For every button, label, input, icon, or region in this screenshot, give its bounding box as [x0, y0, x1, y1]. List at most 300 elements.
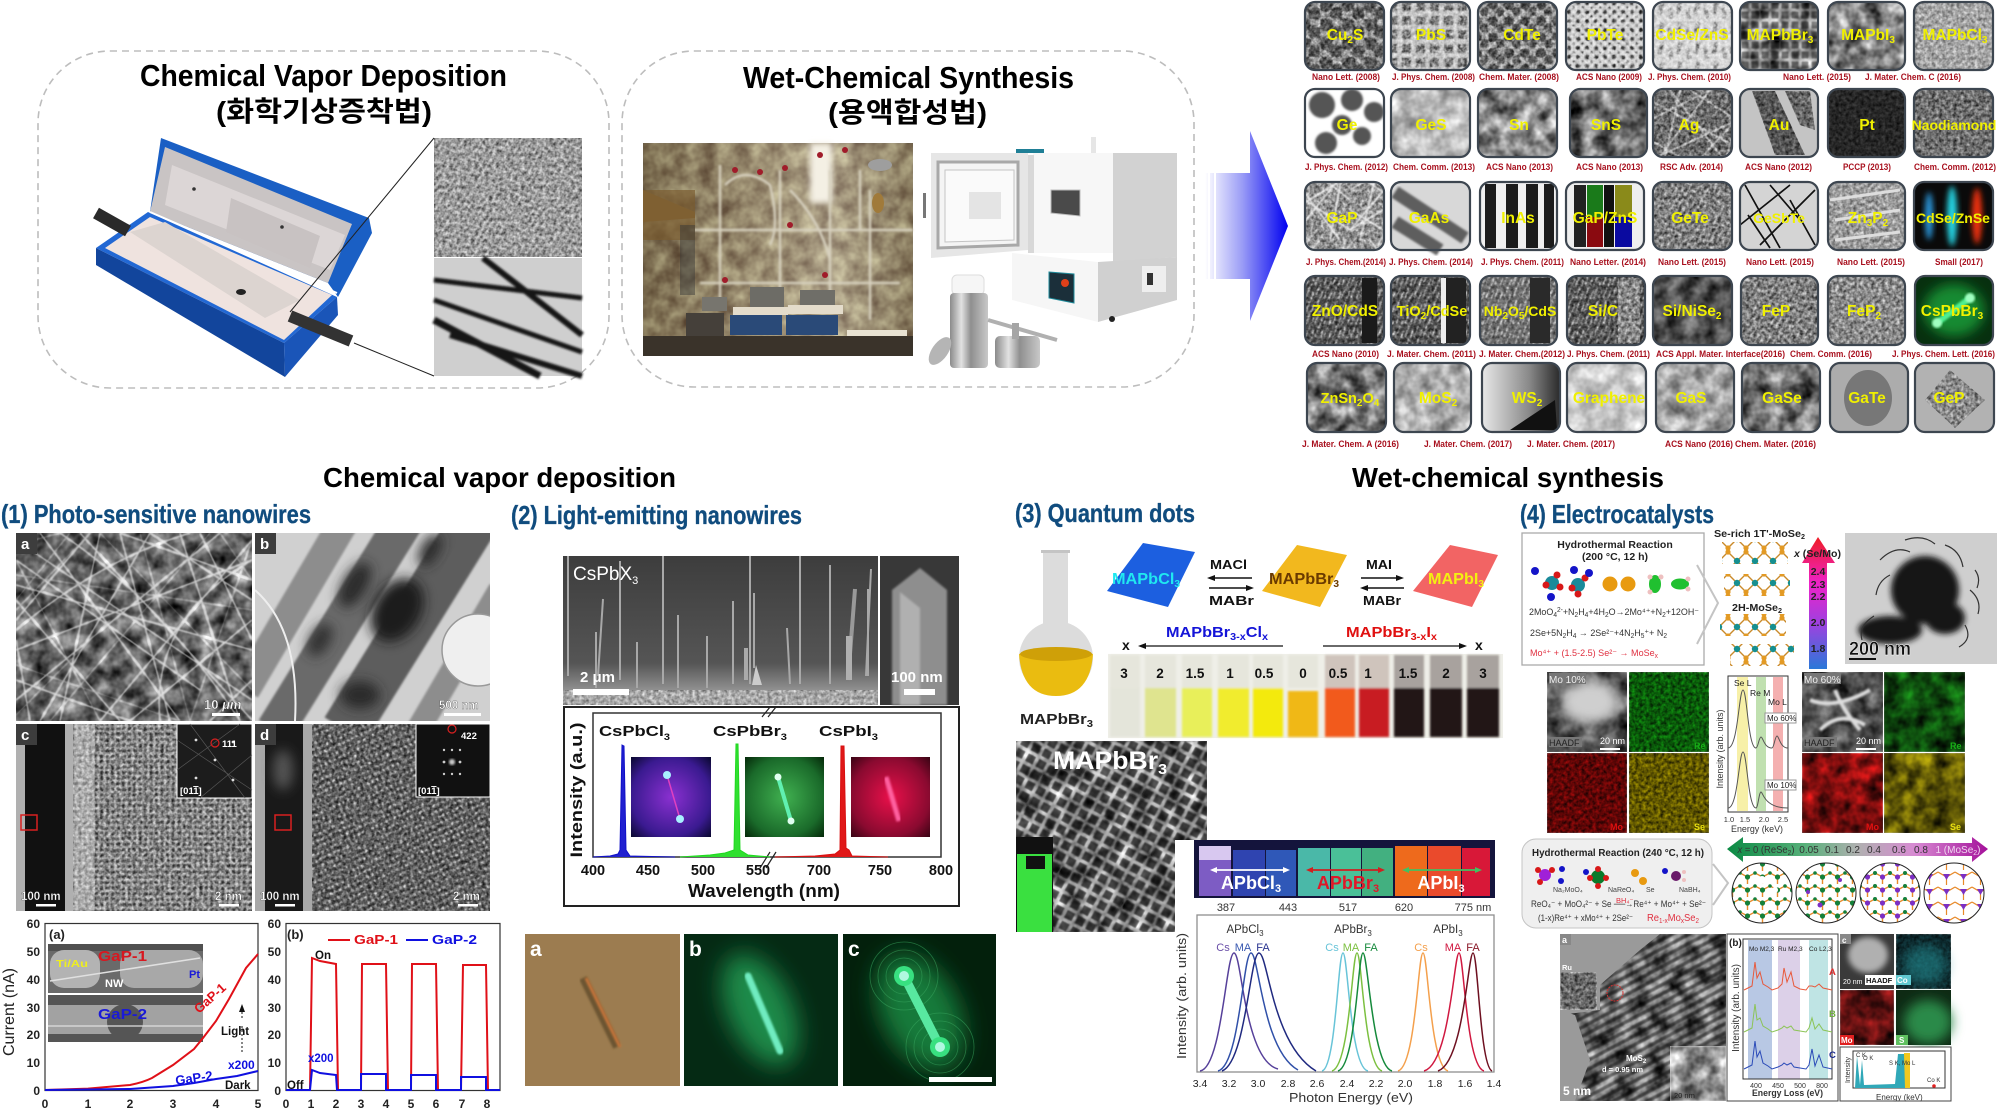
micrograph: MAPbBr3 nanocubes: MAPbBr	[1053, 747, 1152, 775]
micrograph b: TEM nanowires: b	[260, 536, 269, 553]
chart: current vs voltage (a): 30	[27, 1001, 40, 1015]
inset: device SEM images	[48, 944, 203, 1042]
micrograph a: MoS2 HRTEM: Ru	[1562, 963, 1572, 972]
micrograph b: TEM nanowires: 500 nm	[439, 700, 479, 712]
chart: EELS spectra (b): 500	[1794, 1083, 1806, 1090]
arrows: MACI / MABr exchange: MABr	[1209, 594, 1254, 608]
tile: InAs: InAs	[1501, 210, 1535, 227]
citations under tile grid: ACS Nano (2012)	[1745, 162, 1812, 173]
chart: EDS energy spectrum: Co K	[1927, 1078, 1940, 1084]
diagram: MoSe2 crystal structures: Se-rich 1T'-MoSe	[1714, 528, 1799, 540]
chart: photoluminescence spectra: APbCl	[1226, 924, 1259, 936]
tile: Pt: Pt	[1859, 117, 1875, 134]
tile: GaSe: GaSe	[1762, 390, 1802, 407]
tile: FeP2: FeP	[1847, 303, 1875, 320]
box: hydrothermal reaction 200 C: H	[1634, 628, 1641, 639]
box: hydrothermal reaction 200 C: ⁺+ N	[1644, 628, 1663, 639]
icons: precursor molecules	[1535, 866, 1686, 889]
chart: photoluminescence spectra: FA	[1364, 942, 1378, 954]
dashed panel outline	[38, 51, 609, 388]
chart: photoresponse pulses (b): (b)	[287, 927, 304, 942]
tile: CdSe/ZnSe: CdSe/ZnSe	[1916, 210, 1990, 226]
chart: EDS spectra	[1715, 676, 1796, 835]
tile: Ag	[1653, 89, 1732, 157]
chart: current vs voltage (a): 60	[27, 917, 40, 931]
tile: Sn: Sn	[1509, 117, 1529, 134]
micrograph c: HRTEM lattice: 100 nm	[21, 891, 61, 903]
box: hydrothermal reaction 200 C: +N	[1563, 607, 1575, 618]
label: MAPbBr3-xIx series with arrow: x	[1475, 637, 1483, 653]
chart: EDS energy spectrum: C K	[1856, 1053, 1866, 1059]
citations under tile grid: Chem. Mater. (2008)	[1479, 72, 1559, 83]
chart: current vs voltage (a)	[1, 917, 262, 1110]
citations under tile grid: ACS Nano (2010)	[1312, 349, 1379, 360]
tile: GaS	[1656, 363, 1734, 432]
tile: GeS	[1391, 89, 1470, 157]
chart: current vs voltage (a): Pt	[189, 969, 200, 981]
tile: GaS: GaS	[1675, 390, 1707, 407]
micrograph a: MoS2 HRTEM: 2	[1643, 1059, 1647, 1065]
tile: CdSe/ZnS	[1653, 2, 1732, 70]
chart: photoluminescence spectra: Intensity (arb. units)	[1174, 933, 1189, 1059]
chart: wavelength scale: 387	[1217, 902, 1235, 914]
arrows: MAI / MABr exchange: MABr	[1363, 594, 1401, 608]
diagram: MoSe2 crystal structures	[1714, 528, 1805, 666]
micrograph: MAPbBr3 nanocubes: 3	[1158, 761, 1167, 778]
box: hydrothermal reaction 240 C: Mo	[1668, 912, 1681, 924]
tile: InAs	[1480, 182, 1557, 250]
chart: emission spectra: 3	[664, 732, 670, 742]
chart: photoluminescence spectra: 1.8	[1428, 1078, 1442, 1090]
micrograph d: HRTEM lattice: 2 nm	[453, 891, 480, 903]
micrograph a: bright-field nanowire: a	[530, 938, 542, 961]
tile: Si/NiSe2: Si/NiSe	[1663, 303, 1716, 320]
legend: GaP-1, GaP-2: GaP-2	[432, 932, 477, 947]
arrow: composition gradient bar: 0.4	[1867, 845, 1881, 856]
chart: photoluminescence spectra: 3	[1458, 929, 1463, 938]
photo: laboratory glassware	[643, 143, 913, 356]
citations under tile grid: J. Phys. Chem. (2010)	[1648, 72, 1731, 83]
chart: photoluminescence spectra: 2.4	[1340, 1078, 1354, 1090]
chart: EELS spectra (b): (b)	[1729, 938, 1742, 949]
arrow: composition gradient bar: 0.1	[1825, 845, 1839, 856]
citations under tile grid: J. Mater. Chem. A (2016)	[1302, 439, 1399, 450]
arrow: composition gradient bar	[1727, 837, 1988, 862]
panel: chemical vapor deposition furnace	[38, 51, 609, 388]
micrograph c: green waveguiding nanowire	[843, 934, 996, 1086]
box: hydrothermal reaction 200 C: 2	[1563, 633, 1566, 640]
EDS maps: Mo 10%: Mo	[1610, 822, 1623, 832]
chart: current vs voltage (a): GaP-1	[191, 980, 229, 1016]
chart: photoluminescence spectra: 3.0	[1251, 1078, 1265, 1090]
tile: MAPbCl3: 3	[1982, 35, 1988, 46]
citations under tile grid: ACS Nano (2013)	[1486, 162, 1553, 173]
tile: WS2	[1482, 363, 1560, 432]
EDS maps: Mo 10%	[1547, 672, 1709, 833]
tile: ZnSn2O4: 2	[1357, 398, 1363, 409]
arrow: x (Se/Mo) scale: x (Se/Mo)	[1793, 548, 1841, 560]
sub-heading 2: (2) Light-emitting nanowires	[511, 500, 802, 530]
chart: photoresponse pulses (b): x200	[308, 1053, 334, 1065]
tile: CdSe/ZnS: CdSe/ZnS	[1655, 27, 1729, 44]
label: MAPbBr3-xClx series with arrow: MAPbBr	[1166, 624, 1225, 641]
citations under tile grid: J. Mater. Chem. (2017)	[1527, 439, 1615, 450]
chart: emission spectra: CsPbI	[819, 723, 862, 740]
tile: Cu2S: Cu	[1327, 27, 1347, 44]
chart: photoluminescence spectra: 2.6	[1310, 1078, 1324, 1090]
micrograph: MoSe2 nanoflower TEM	[1845, 533, 1997, 664]
icon: round-bottom flask	[1019, 550, 1093, 696]
chart: current vs voltage (a): 40	[27, 973, 40, 987]
chart: photoluminescence spectra: FA	[1466, 942, 1480, 954]
chart: current vs voltage (a): Ti/Au	[56, 958, 88, 970]
tile: CdSe/ZnSe	[1914, 182, 1993, 250]
box: hydrothermal reaction 200 C: 2	[1631, 633, 1634, 640]
icon: muffle furnace oven	[923, 137, 1177, 322]
tile: TiO2/CdSe: 2	[1421, 311, 1427, 322]
tile: Nb2O5/CdS: 2	[1502, 311, 1508, 322]
tile: GaTe: GaTe	[1848, 390, 1886, 407]
tile: GaP	[1305, 182, 1384, 250]
tile: Au: Au	[1769, 117, 1789, 134]
arrows: MACI / MABr exchange: MACl	[1210, 558, 1247, 572]
label: MAPbBr3-xIx series with arrow: 3-x	[1411, 632, 1427, 643]
chart: EDS spectra: 1.5	[1740, 815, 1750, 824]
box: hydrothermal reaction 200 C: 4	[1585, 612, 1588, 619]
photo: composition-series vials: 3	[1120, 666, 1128, 681]
chart: current vs voltage (a): (a)	[49, 927, 65, 942]
EDS maps (c): Co	[1897, 976, 1908, 985]
tile: Zn3P2: 3	[1867, 218, 1873, 229]
chart: EELS spectra (b): Intensity (arb. units)	[1731, 964, 1742, 1052]
arrow: x (Se/Mo) scale: 1.8	[1811, 643, 1825, 655]
photo: composition-series vials: 1	[1226, 666, 1234, 681]
chart: wavelength scale: 775 nm	[1455, 902, 1491, 914]
chart: EDS spectra: Se L	[1734, 678, 1752, 688]
EDS maps (c): HAADF	[1866, 976, 1893, 985]
chart: EDS spectra: Re M	[1750, 688, 1770, 698]
chart: emission spectra: CsPbCl	[599, 723, 652, 740]
citations under tile grid: J. Phys. Chem. (2011)	[1567, 349, 1650, 360]
arrow: x (Se/Mo) scale: 2.2	[1811, 591, 1825, 603]
micrograph: MoSe2 nanoflower TEM: 200 nm	[1849, 639, 1911, 660]
citations under tile grid: Nano Lett. (2015)	[1746, 257, 1814, 268]
citations under tile grid: ACS Nano (2016)	[1665, 439, 1733, 450]
chart: current vs voltage (a): Dark	[225, 1080, 251, 1092]
arrow: composition gradient bar: 0.8	[1914, 845, 1928, 856]
chart: emission spectra: Wavelength (nm)	[688, 881, 840, 901]
micrograph c: HRTEM lattice: [011]	[180, 786, 202, 797]
tile: Si/NiSe2: 2	[1716, 311, 1722, 322]
box: hydrothermal reaction 200 C: O→2Mo⁴⁺+N	[1609, 607, 1662, 618]
tile: ZnO/CdS	[1305, 276, 1384, 345]
box: hydrothermal reaction 200 C: H	[1578, 607, 1585, 618]
chart: EELS spectra (b): 800	[1816, 1083, 1828, 1090]
citations under tile grid: RSC Adv. (2014)	[1660, 162, 1723, 173]
photo: green vial inset	[1016, 837, 1053, 932]
tile: GaAs: GaAs	[1409, 210, 1449, 227]
box: hydrothermal reaction 200 C: 4	[1573, 633, 1577, 640]
micrograph b: green photoluminescence	[684, 934, 838, 1086]
icon: MAPbI3 film: MAPbI	[1428, 571, 1478, 588]
box: hydrothermal reaction 200 C: +12OH⁻	[1666, 607, 1699, 618]
chart: photoluminescence spectra: 3.2	[1222, 1078, 1236, 1090]
arrows: MAI / MABr exchange: MAI	[1366, 558, 1392, 572]
citations under tile grid: J. Phys. Chem. (2008)	[1392, 72, 1475, 83]
chart: current vs voltage (a): Light	[221, 1026, 249, 1038]
box: hydrothermal reaction 240 C: Se	[1646, 887, 1655, 894]
panel: (1) photo-sensitive nanowires	[1, 499, 514, 1110]
sub-heading 1: (1) Photo-sensitive nanowires	[1, 499, 311, 529]
chart: photoresponse pulses (b): 40	[268, 973, 281, 987]
heading: wet-chemical synthesis section: Wet-chemical synthesis	[1352, 462, 1664, 493]
citations under tile grid: Chem. Mater. (2016)	[1735, 439, 1816, 450]
tile: ZnSn2O4: 4	[1374, 398, 1380, 409]
chart: photoresponse pulses (b): 0	[274, 1084, 281, 1098]
box: hydrothermal reaction 200 C	[1522, 533, 1704, 665]
arrow: x (Se/Mo) scale: 2.4	[1811, 566, 1825, 578]
micrograph c: HRTEM lattice	[16, 724, 252, 911]
chart: photoluminescence spectra: MA	[1445, 942, 1462, 954]
tile: MoS2: MoS	[1419, 390, 1452, 407]
chart: EDS spectra: Mo 10%	[1767, 781, 1796, 790]
photo: composition-series vials: 2	[1156, 666, 1164, 681]
citations under tile grid: J. Mater. Chem.(2012)	[1479, 349, 1565, 360]
chart: photoluminescence spectra: 2.2	[1369, 1078, 1383, 1090]
chart: photoluminescence spectra: 1.4	[1487, 1078, 1501, 1090]
chart: current vs voltage (a): x200	[228, 1058, 255, 1072]
tile: Si/C	[1567, 276, 1645, 345]
label: MAPbBr3-xIx series with arrow	[1323, 624, 1483, 653]
tile: TiO2/CdSe: TiO	[1397, 304, 1421, 320]
micrograph a: MoS2 HRTEM: 5 nm	[1563, 1084, 1591, 1098]
micrograph a: SEM nanowires	[16, 533, 252, 721]
citations under tile grid: Nano Letter. (2014)	[1570, 257, 1646, 268]
box: hydrothermal reaction 200 C: 2	[1605, 612, 1609, 619]
tile: WS2: 2	[1537, 398, 1543, 409]
EDS maps: Mo 10%: Re	[1694, 741, 1706, 751]
micrograph a: bright-field nanowire	[525, 934, 680, 1086]
tile: Graphene: Graphene	[1573, 390, 1646, 407]
box: hydrothermal reaction 240 C: ReO₄⁻ + MoO₄²⁻ + Se ──→Re⁴⁺ + Mo⁴⁺ + Se²⁻	[1531, 899, 1706, 910]
chart: EELS spectra (b): Ru M2,3	[1778, 946, 1803, 953]
chart: EDS spectra: Intensity (arb. units)	[1715, 709, 1725, 789]
chart: photoresponse pulses (b): 50	[268, 945, 281, 959]
chart: EDS energy spectrum: S K, Mo L	[1889, 1061, 1916, 1067]
chart: EELS spectra (b): B	[1829, 1009, 1836, 1020]
chart: photoluminescence spectra: MA	[1343, 942, 1360, 954]
arrow: composition gradient bar: 0.05	[1799, 845, 1819, 856]
tile: MAPbI3: 3	[1889, 35, 1895, 46]
tile: GaP/ZnS	[1566, 182, 1644, 250]
icon: MAPbCl3 film: 3	[1174, 579, 1180, 590]
box: hydrothermal reaction 200 C: 2Se+5N	[1530, 628, 1565, 639]
chart: current vs voltage (a): 50	[27, 945, 40, 959]
micrograph d: HRTEM lattice	[255, 724, 490, 911]
chart: photoluminescence spectra: 1.6	[1458, 1078, 1472, 1090]
box: hydrothermal reaction 200 C: +4H	[1588, 607, 1605, 618]
tile: Naodiamond	[1912, 89, 1996, 157]
EDS maps (c): c	[1842, 936, 1847, 945]
tile: GeSbTe: GeSbTe	[1753, 210, 1805, 226]
tile: MAPbBr3: MAPbBr	[1747, 27, 1808, 44]
photo: UV-lit perovskite strip: 3	[1458, 883, 1465, 895]
tile: PbS: PbS	[1416, 27, 1446, 44]
chart: wavelength scale	[1217, 902, 1491, 914]
citations under tile grid: Nano Lett. (2008)	[1312, 72, 1380, 83]
panel: (2) light-emitting nanowires	[511, 500, 996, 1086]
chart: photoresponse pulses (b): On	[315, 950, 331, 962]
citations under tile grid: Chem. Comm. (2013)	[1393, 162, 1475, 173]
heading: wet-chemical synthesis: Wet-Chemical Synthesis	[743, 60, 1074, 95]
chart: EDS spectra: 2.5	[1778, 815, 1788, 824]
box: hydrothermal reaction 240 C: Se	[1684, 912, 1696, 924]
box: hydrothermal reaction 200 C: 5	[1641, 633, 1645, 640]
micrograph d: HRTEM lattice: d	[260, 727, 269, 744]
chart: photoresponse pulses (b)	[268, 917, 500, 1110]
chart: photoluminescence spectra: APbBr	[1334, 924, 1367, 936]
chart: photoresponse pulses (b): 20	[268, 1028, 281, 1042]
tile: Pt	[1828, 89, 1905, 157]
tile: MoS2	[1394, 363, 1471, 432]
EDS maps: Mo 60%: Mo	[1866, 822, 1879, 832]
icon: MAPbBr3 film	[1262, 545, 1347, 607]
icon: MAPbI3 film	[1413, 545, 1498, 607]
chart: current vs voltage (a): 0	[33, 1084, 40, 1098]
arrow: x (Se/Mo) scale: 2.3	[1811, 579, 1825, 591]
tile: CdTe	[1478, 2, 1557, 70]
micrograph c: HRTEM lattice: c	[21, 727, 29, 744]
box: hydrothermal reaction 240 C: (1-x)Re⁴⁺ + xMo⁴⁺ + 2Se²⁻	[1538, 913, 1633, 924]
EDS maps (c): S	[1899, 1036, 1905, 1045]
chart: current vs voltage (a): 10	[27, 1056, 40, 1070]
label: MAPbBr3-xIx series with arrow: x	[1431, 632, 1437, 643]
micrograph a: MoS2 HRTEM	[1560, 934, 1726, 1101]
icon: MAPbCl3 film	[1107, 543, 1195, 607]
tile: SnS: SnS	[1591, 117, 1621, 134]
photo: composition-series vials: 1.5	[1399, 666, 1418, 681]
chart: emission spectra: 500	[691, 863, 715, 879]
chart: wavelength scale: 443	[1279, 902, 1297, 914]
micrograph b: TEM nanowires	[245, 520, 514, 735]
arrow: composition gradient bar: 0.6	[1892, 845, 1906, 856]
chart: wavelength scale: 517	[1339, 902, 1357, 914]
chart: current vs voltage (a): 20	[27, 1028, 40, 1042]
chart: photoluminescence spectra: Photon Energy (eV)	[1289, 1090, 1413, 1105]
diagram: MoSe2 crystal structures: 2	[1778, 608, 1782, 615]
panel: nanomaterial tile grid	[1302, 2, 1996, 450]
micrograph a: SEM nanowires: 10 μm	[204, 697, 242, 712]
chart: photoluminescence spectra: Cs	[1414, 942, 1428, 954]
chart: photoluminescence spectra	[1174, 915, 1501, 1105]
citations under tile grid: Small (2017)	[1935, 257, 1983, 268]
chart: photoluminescence spectra: 3	[1259, 929, 1264, 938]
tile: Cu2S: 2	[1347, 35, 1353, 46]
chart: EELS spectra (b): Co L2,3	[1809, 946, 1832, 953]
label: MAPbBr3-xClx series with arrow: x	[1262, 632, 1268, 643]
chart: emission spectra: Intensity (a.u.)	[567, 722, 586, 858]
icons: reactant molecules	[1531, 566, 1690, 601]
tile: GeTe: GeTe	[1671, 210, 1709, 227]
tile: Au	[1740, 89, 1818, 157]
tile: GaSe	[1742, 363, 1820, 432]
chart: current vs voltage (a): GaP-2	[174, 1068, 214, 1088]
chart: emission spectra: 800	[929, 863, 953, 879]
tile: MAPbI3: MAPbI	[1841, 27, 1889, 44]
sub-heading 4: (4) Electrocatalysts	[1520, 499, 1714, 529]
tile: ZnSn2O4: ZnSn	[1321, 391, 1357, 407]
box: hydrothermal reaction 240 C: x	[1681, 918, 1684, 925]
tile: MAPbI3	[1828, 2, 1905, 70]
micrograph a: MoS2 HRTEM: 20 nm	[1674, 1091, 1695, 1100]
tile: Zn3P2: Zn	[1848, 210, 1867, 227]
tile: MAPbCl3	[1914, 2, 1993, 70]
diagram: atomic lattice discs	[1732, 863, 1984, 923]
chart: photoresponse pulses (b): Off	[287, 1080, 304, 1092]
arrow: composition gradient bar: 1 (MoSe	[1935, 845, 1973, 856]
label: MAPbBr3-xClx series with arrow: Cl	[1246, 624, 1262, 641]
panel: (3) quantum dots	[1015, 498, 1503, 1105]
chart: current vs voltage (a): Current (nA)	[1, 968, 18, 1056]
tile: TiO2/CdSe: /CdSe	[1426, 304, 1467, 320]
box: hydrothermal reaction 240 C: Na₂MoO₄	[1553, 887, 1583, 894]
tile: PbTe	[1566, 2, 1644, 70]
chart: EDS energy spectrum	[1840, 1047, 1951, 1102]
micrograph: CsPbX3 nanowire forest: CsPbX	[573, 564, 632, 585]
photo: composition-series vials: 3	[1479, 666, 1487, 681]
box: hydrothermal reaction 200 C: 2	[1662, 612, 1666, 619]
icon: MAPbBr3 film: MAPbBr	[1269, 571, 1332, 588]
label: MAPbBr3-xClx series with arrow	[1122, 624, 1283, 653]
photo: composition-series vials: 0.5	[1329, 666, 1348, 681]
tile: Si/NiSe2	[1653, 276, 1732, 345]
chart: EELS spectra (b): C	[1829, 1050, 1836, 1061]
label: MAPbBr3-xClx series with arrow: 3-x	[1230, 632, 1246, 643]
photo: UV-lit perovskite strip: APbBr	[1317, 873, 1373, 893]
citations under tile grid: ACS Appl. Mater. Interface(2016)	[1656, 349, 1785, 360]
chart: photoluminescence spectra: 3.4	[1193, 1078, 1207, 1090]
tile: Nb2O5/CdS	[1480, 276, 1557, 345]
tile: GaP: GaP	[1326, 210, 1358, 227]
box: hydrothermal reaction 200 C: 2	[1575, 612, 1578, 619]
photo: composition-series vials	[1108, 654, 1503, 738]
chart: photoluminescence spectra: 2.0	[1398, 1078, 1412, 1090]
micrograph: CsPbX3 nanowire forest: 2 μm	[580, 669, 615, 686]
arrow: gradient blue process arrow	[1205, 131, 1288, 321]
tile: Sn	[1478, 89, 1557, 157]
photo: UV-lit perovskite strip: 3	[1373, 883, 1379, 895]
chart: EDS spectra: 2.0	[1759, 815, 1769, 824]
micrograph: CsPbX3 nanowire forest: 3	[632, 575, 638, 587]
tile: Nb2O5/CdS: 5	[1519, 311, 1525, 322]
tile: CdTe: CdTe	[1503, 27, 1541, 44]
EDS maps (c): Mo	[1841, 1036, 1853, 1045]
tile: GaAs	[1391, 182, 1470, 250]
tile: WS2: WS	[1512, 390, 1537, 407]
box: hydrothermal reaction 240 C: NaReO₄	[1608, 887, 1634, 894]
chart: emission spectra: 750	[868, 863, 892, 879]
tile: MAPbBr3: 3	[1808, 35, 1814, 46]
white backing behind strip and plot	[1175, 840, 1500, 932]
tile: Zn3P2: P	[1872, 210, 1883, 227]
chart: EDS energy spectrum: O K	[1863, 1056, 1873, 1062]
chart: EELS spectra (b): 400	[1750, 1083, 1762, 1090]
EDS maps (c)	[1840, 934, 1952, 1102]
photo: UV-lit perovskite strip: APbCl	[1221, 873, 1275, 893]
arrows: MACI / MABr exchange	[1207, 558, 1254, 608]
chart: EDS spectra: Energy (keV)	[1731, 824, 1783, 835]
heading: korean subtitle: (화학기상증착법)	[216, 96, 432, 127]
